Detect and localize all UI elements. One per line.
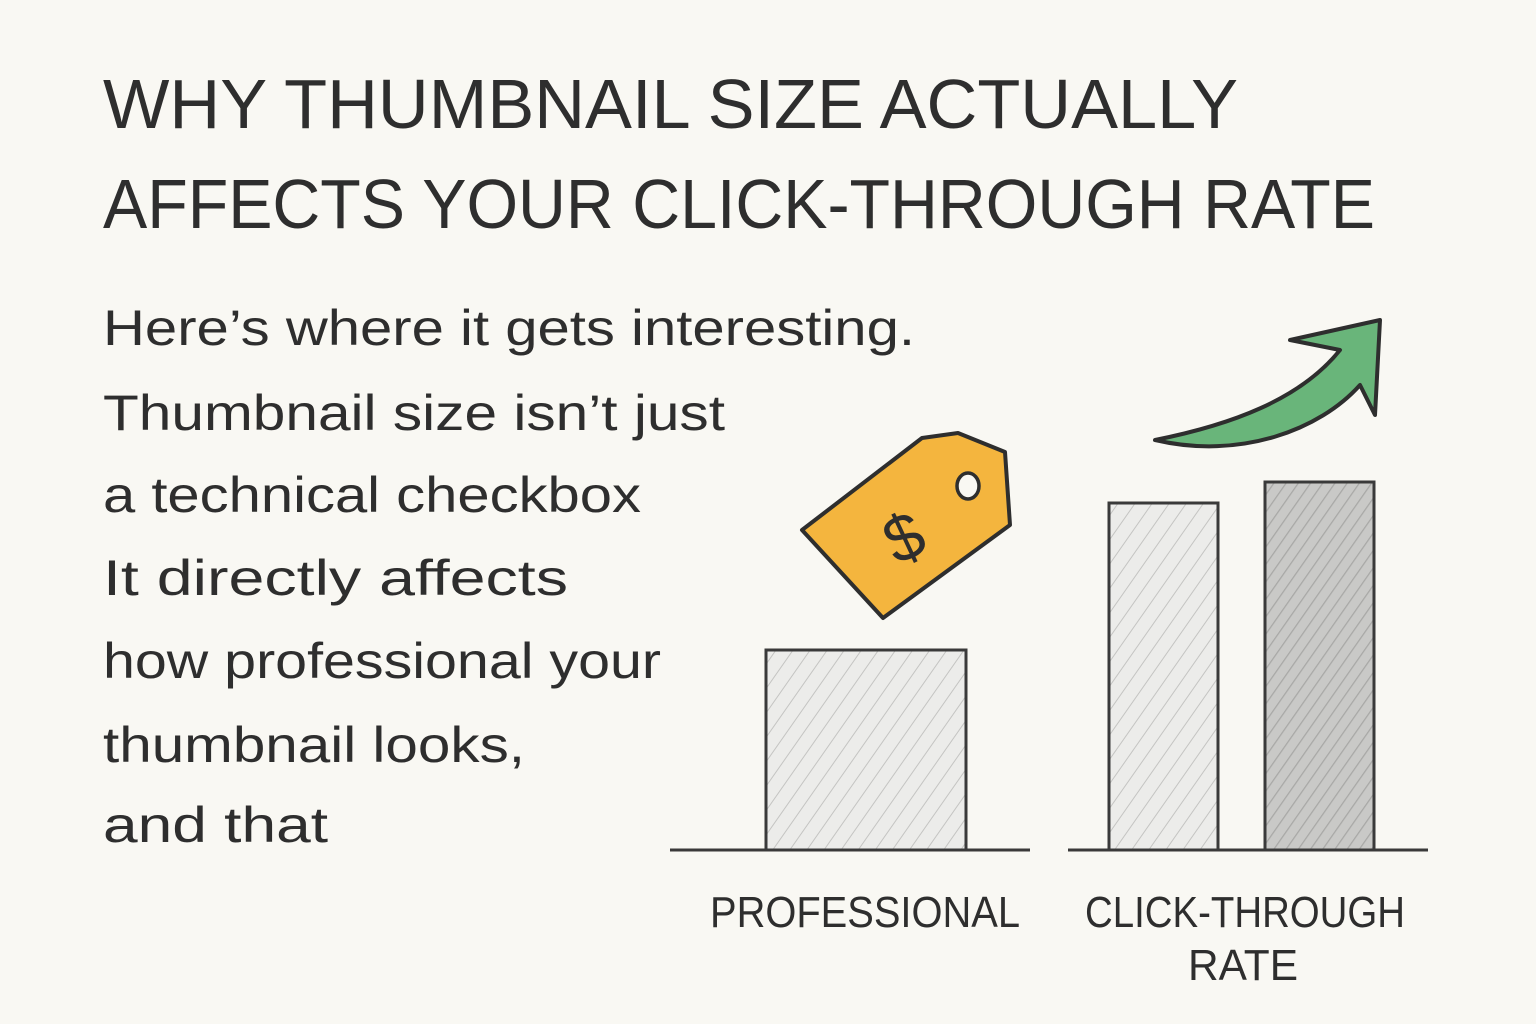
bar chart: click-through rate: [1068, 482, 1428, 850]
body text: a technical checkbox: [103, 467, 641, 523]
label: click-through rate: RATE: [1188, 941, 1298, 990]
icon: price tag: [802, 433, 1010, 618]
body text: Thumbnail size isn’t just: [103, 385, 725, 441]
bar chart: professional: [670, 650, 1030, 850]
icon: green arrow: [1155, 320, 1380, 446]
label: professional: PROFESSIONAL: [710, 888, 1020, 937]
title: WHY THUMBNAIL SIZE ACTUALLY: [103, 65, 1238, 143]
title: AFFECTS YOUR CLICK-THROUGH RATE: [103, 165, 1375, 243]
title: [103, 65, 1375, 243]
body text: [103, 300, 915, 853]
body text: Here’s where it gets interesting.: [103, 300, 915, 356]
body text: and that: [103, 797, 328, 853]
body text: It directly affects: [103, 550, 568, 606]
body text: thumbnail looks,: [103, 717, 525, 773]
label: click-through rate: [1085, 888, 1405, 990]
label: click-through rate: CLICK-THROUGH: [1085, 888, 1405, 937]
icon: price tag: $: [871, 496, 936, 579]
body text: how professional your: [103, 633, 661, 689]
